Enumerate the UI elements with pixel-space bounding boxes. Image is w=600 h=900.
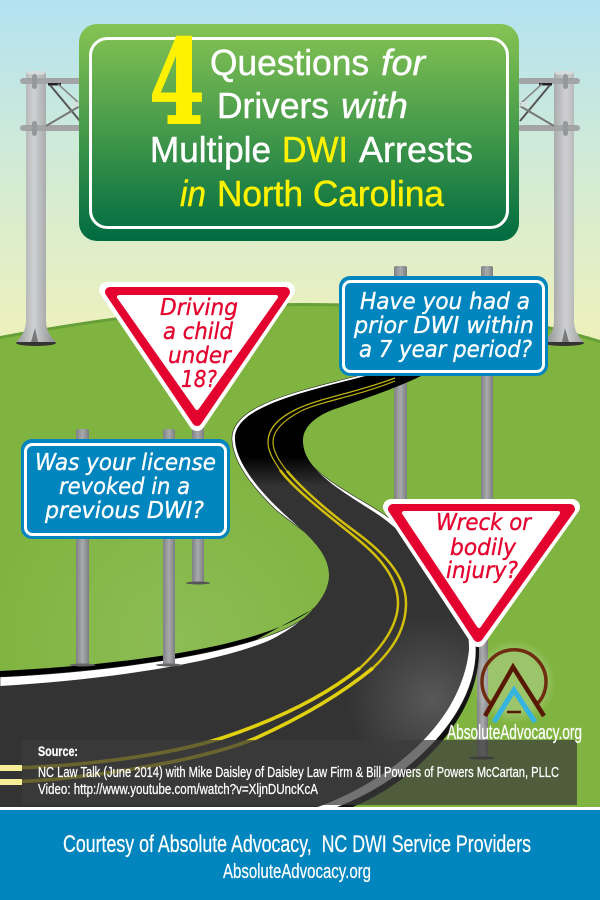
title line 3: Multiple — [150, 129, 271, 170]
question text: under — [168, 343, 232, 369]
blue sign: prior DWI — [339, 276, 548, 376]
footer band — [0, 807, 600, 900]
title line 4: in — [180, 173, 206, 214]
question text: Driving — [160, 295, 238, 321]
sky background — [0, 0, 600, 345]
question text: prior DWI within — [353, 313, 534, 339]
question text: 18? — [181, 367, 217, 393]
winding road — [0, 365, 479, 808]
yield sign: wreck or injury — [391, 507, 572, 639]
title line 1: Questions — [210, 42, 369, 83]
icon: Absolute Advocacy logo — [472, 640, 556, 724]
blue sign: license revoked — [21, 439, 230, 539]
question text: bodily — [450, 535, 516, 561]
source panel — [22, 740, 577, 805]
question text: Was your license — [35, 450, 216, 476]
title line 2: Drivers — [217, 85, 329, 126]
question text: Have you had a — [360, 289, 530, 315]
question text: a 7 year period? — [359, 337, 532, 363]
yield sign: driving a child — [107, 290, 287, 423]
title line 4: North Carolina — [217, 173, 445, 214]
title line 3: Arrests — [359, 129, 473, 170]
big yellow numeral 4: 4 — [150, 15, 204, 151]
overhead gantry: right pylon — [518, 71, 584, 346]
video link: Video: http://www.youtube.com/watch?v=XljnDUncKcA — [38, 782, 318, 798]
post of the wreck sign — [469, 640, 495, 760]
overhead gantry: left pylon — [16, 71, 82, 346]
overhead green sign: title — [79, 15, 519, 241]
source heading: Source: — [38, 743, 78, 759]
question text: Wreck or — [436, 510, 532, 536]
question text: previous DWI? — [44, 498, 204, 524]
sign inner border — [90, 38, 508, 228]
title line 3: DWI — [282, 129, 348, 170]
question text: a child — [163, 319, 233, 345]
question text: injury? — [446, 558, 518, 584]
title line 1: for — [381, 42, 427, 83]
footer website: AbsoluteAdvocacy.org — [223, 861, 371, 883]
sign panel — [79, 24, 519, 241]
sign posts behind the road — [186, 266, 493, 584]
blue sign posts: license sign — [70, 429, 182, 666]
title line 2: with — [341, 85, 408, 126]
question text: revoked in a — [59, 474, 190, 500]
green hill — [0, 303, 600, 810]
